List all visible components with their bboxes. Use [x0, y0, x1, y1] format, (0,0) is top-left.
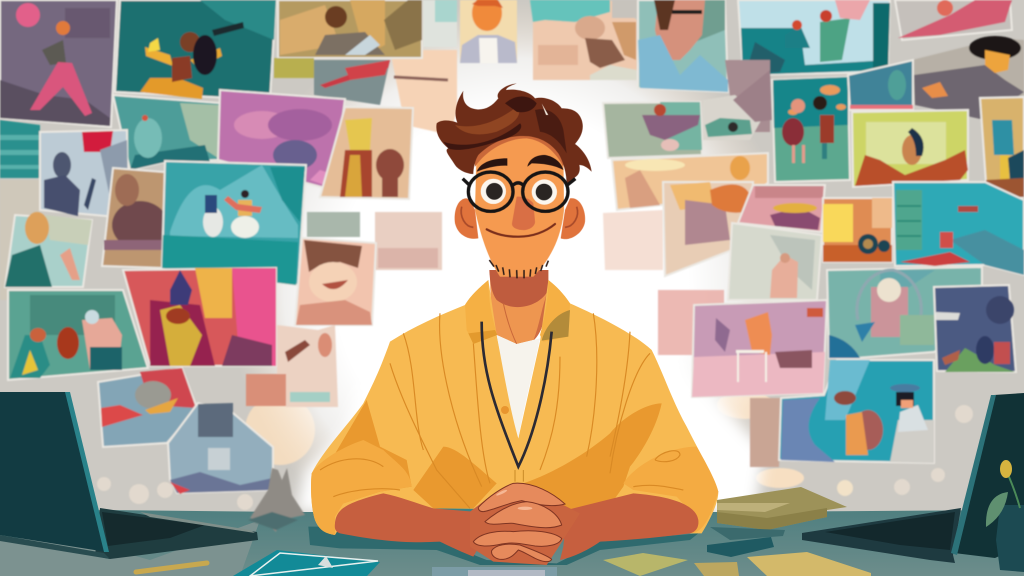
card: boy in lavender jacket: [460, 0, 517, 63]
card: two children holding hands: [772, 77, 850, 182]
collars: [465, 280, 570, 344]
card: walking figure in pink trousers: [0, 0, 117, 127]
card: mauve shape behind: [725, 60, 770, 132]
card: boy laughing: [295, 238, 376, 325]
card: pink figure on grey: [895, 0, 1012, 40]
person body: [308, 270, 718, 565]
card: blue small fragment: [848, 60, 913, 110]
panel: collage left side: [0, 0, 422, 494]
clasped hands: [470, 483, 580, 565]
papers on desk: [432, 552, 871, 576]
card: pale sketch figure: [728, 223, 822, 300]
card: faded doorway: [750, 398, 781, 467]
card: torn window vignette: [703, 70, 772, 140]
card: grey-blue robot: [40, 130, 128, 218]
card: faded teal portrait: [307, 212, 360, 237]
rolled cuffs: [311, 440, 718, 535]
card: yellow-green room with man: [852, 110, 968, 187]
desk: [0, 510, 1024, 576]
card: faded grey sketch: [423, 0, 457, 47]
card: teal figure scene: [113, 95, 220, 170]
card: man with glasses and blue shirt: [638, 0, 728, 92]
card: woman with yellow sleeves on teal: [115, 0, 276, 100]
forehead shadow: [473, 130, 563, 167]
plant in vase: [986, 460, 1024, 572]
card: faded mid left: [375, 212, 442, 270]
right forearm: [560, 493, 698, 560]
phones: [707, 527, 785, 557]
card: olive strip: [274, 58, 314, 78]
card: figure in blue dress: [980, 97, 1024, 198]
small grey clay figure on desk: [248, 468, 305, 532]
card: dark blue night figures: [934, 285, 1016, 372]
card: peach clouds: [612, 153, 768, 210]
teal desk strip behind arms: [432, 507, 608, 530]
card: orange window and motorbike: [823, 198, 892, 262]
panel: collage right side: [603, 0, 1024, 463]
card: faded pink lower right: [658, 290, 724, 355]
card: man with black hair pointing: [912, 36, 1024, 120]
card: red and magenta figure: [123, 268, 276, 366]
card: red and grey fragment: [314, 60, 390, 105]
card: tan portrait at top: [278, 0, 422, 58]
card: robed figure in tan: [320, 107, 413, 199]
lanyard: [482, 322, 552, 482]
left forearm: [335, 493, 487, 557]
white central glow: [227, 1, 797, 575]
card: teal room with stairs: [893, 182, 1024, 275]
card: faded seated figure: [246, 325, 338, 407]
smile: [487, 224, 555, 237]
nose: [512, 197, 535, 230]
eyes: [481, 179, 557, 205]
warm wash behind the glow: [0, 180, 804, 488]
desk shadow under arms: [308, 527, 698, 565]
button: [501, 406, 509, 414]
head: [436, 83, 592, 278]
hair: [436, 83, 592, 185]
card: pink room: [738, 185, 825, 232]
card: teal machine scene: [738, 0, 890, 75]
laptop right: [802, 393, 1024, 563]
olive pillow books: [717, 487, 847, 530]
shirt shadows: [333, 400, 662, 510]
card: green room with masked man: [8, 290, 148, 380]
glasses: [463, 172, 575, 211]
pencil: [136, 563, 207, 572]
ears: [455, 198, 585, 239]
card: man with hand raised: [5, 212, 92, 287]
card: peach sketch with handwriting marks: [390, 50, 457, 135]
laptop left: [0, 392, 258, 559]
eyebrows: [477, 155, 563, 172]
white t-shirt: [497, 335, 540, 438]
card: woman in orange dress: [663, 156, 753, 276]
face: [475, 136, 564, 277]
clipboard: [233, 550, 380, 576]
beard: [489, 260, 548, 278]
card: hat figure in tan-green: [603, 102, 702, 158]
card: round figure with clock face: [827, 267, 982, 358]
card: turquoise dancers in cave: [162, 161, 306, 285]
card: magenta crowd: [218, 90, 345, 190]
wall paint blotches: [97, 391, 973, 510]
card: donkey and woman on blue: [779, 360, 934, 463]
neck: [489, 270, 548, 344]
faded cards on the glow: [307, 0, 781, 467]
card: purple room with seated orange figure: [692, 300, 827, 397]
card: man with peach background: [530, 0, 637, 80]
shirt body: [311, 280, 718, 535]
card: grey-blue duck scene: [98, 368, 197, 447]
card: brown seated figures: [102, 168, 168, 268]
card: teal stripes: [0, 120, 40, 178]
card: faded right: [603, 210, 663, 270]
shirt fold lines: [320, 313, 683, 508]
card: grey blue lower scene: [168, 403, 273, 494]
